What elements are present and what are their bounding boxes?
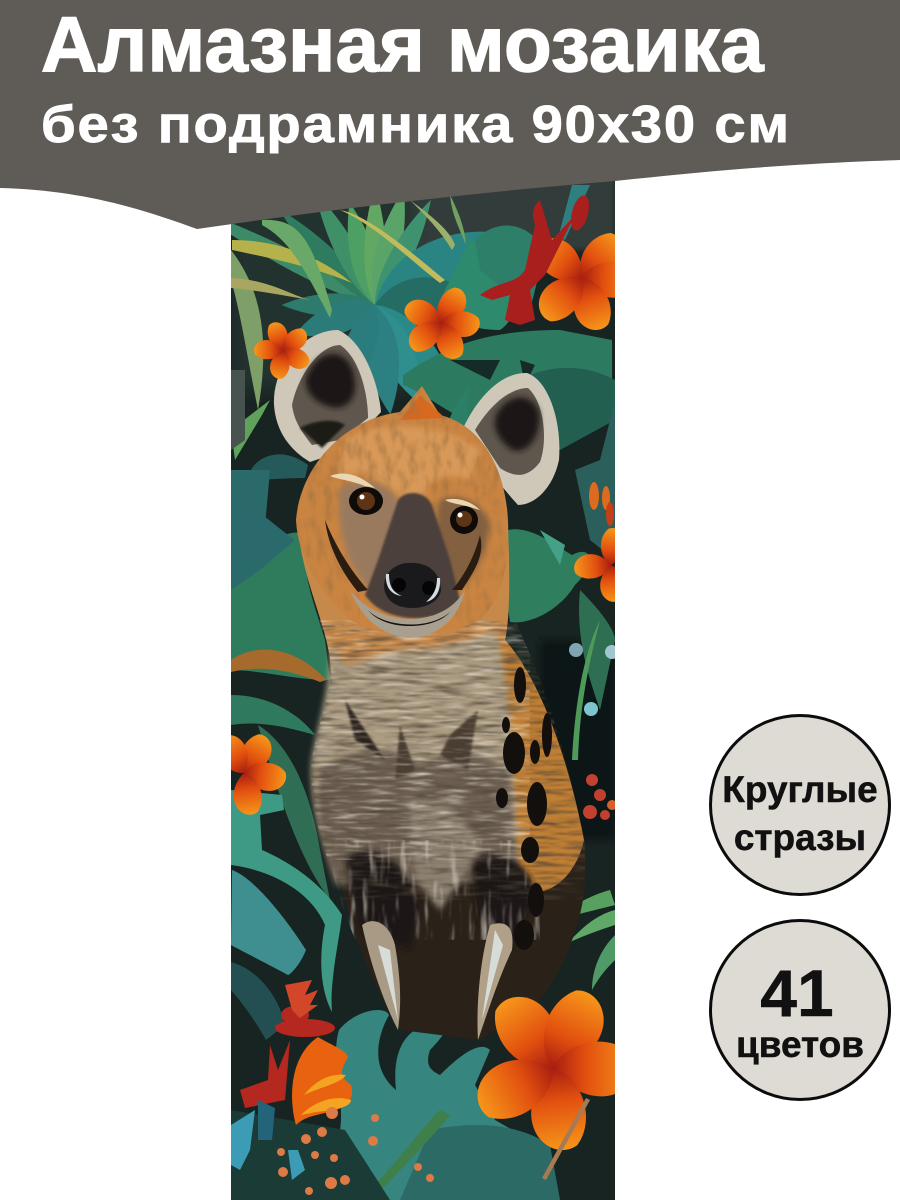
badge: 41 colours: цветов <box>736 1024 864 1065</box>
flower: bottom left orange <box>292 1037 352 1125</box>
flower: right edge small <box>589 482 614 526</box>
heading: main title: Алмазная мозаика <box>41 0 764 88</box>
hyena: nose <box>384 563 441 608</box>
flower: top centre <box>404 288 480 359</box>
painting: hyena in the jungle <box>231 181 615 1200</box>
foliage: right leaves <box>506 529 619 990</box>
hyena: left eye <box>349 487 383 515</box>
foliage: bottom monstera <box>231 1010 560 1200</box>
foliage: left teal leaf <box>231 790 342 1040</box>
hyena: fur streaks <box>290 620 590 940</box>
flower: top left <box>254 322 310 379</box>
small red flowers right <box>583 774 617 820</box>
jungle background <box>231 170 615 1200</box>
badge: 41 colours <box>709 919 891 1101</box>
hyena: lower body <box>338 840 586 1040</box>
hyena: spots <box>496 667 552 950</box>
hyena: left foreleg <box>362 921 400 1030</box>
hyena: right eye <box>450 506 478 534</box>
badge: round rhinestones <box>709 714 891 896</box>
hyena: chest shadow <box>318 751 520 885</box>
badge: 41 colours: 41 <box>760 956 834 1030</box>
flower: right edge <box>574 528 615 602</box>
brush marks: bottom left <box>231 1100 305 1180</box>
hyena: right foreleg <box>478 923 513 1040</box>
flower: left edge <box>231 734 286 815</box>
hyena: left ear <box>274 330 381 462</box>
flower: red sprigs bottom left <box>240 980 335 1108</box>
hyena: white leg fur <box>378 930 503 1020</box>
flower: large bottom right <box>478 990 615 1150</box>
hyena: neck <box>300 532 510 674</box>
hyena: chest tufts <box>345 799 535 950</box>
foliage: left big leaves <box>231 495 330 900</box>
foliage: monstera behind flower <box>403 226 615 560</box>
flower: red sprigs top right <box>480 194 592 325</box>
hyena: chest dark marks <box>345 700 478 780</box>
hyena <box>274 330 590 1040</box>
badge: round rhinestones: стразы <box>734 817 866 858</box>
flower: top right <box>538 233 615 330</box>
heading: subtitle: без подрамника 90х30 см <box>41 96 791 154</box>
hyena: orange flank <box>494 630 584 893</box>
badge: round rhinestones: Круглые <box>722 769 878 810</box>
foliage: left blades <box>231 220 352 518</box>
hyena: right ear <box>461 373 559 505</box>
hyena: chest <box>311 630 515 880</box>
hyena: head <box>290 385 515 638</box>
foliage: stem under big flower <box>542 1098 590 1180</box>
speckles: small orange blossoms <box>277 1107 434 1195</box>
foliage: palm fan <box>231 196 486 414</box>
header banner <box>0 0 900 229</box>
